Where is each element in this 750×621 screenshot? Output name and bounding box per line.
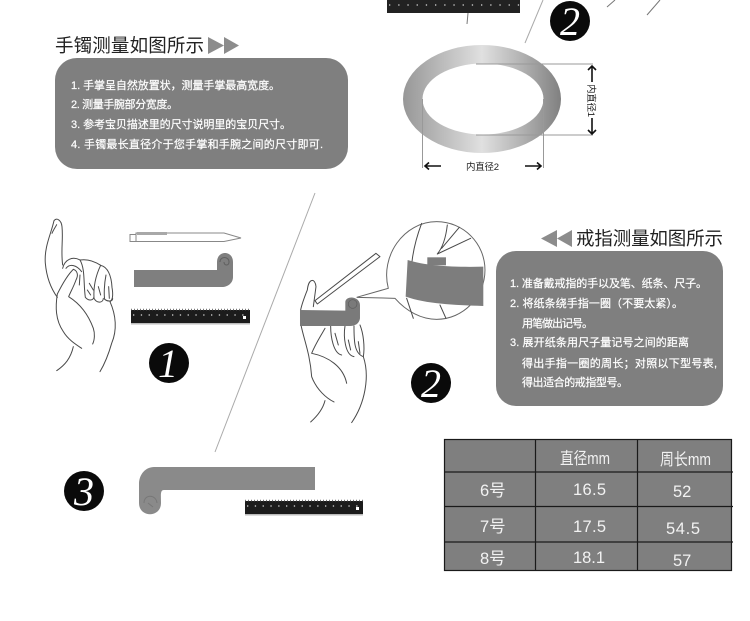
- row: size 8: 57: [673, 552, 691, 570]
- step 2 illustration: [300, 222, 485, 423]
- panel: ring instructions: 2. 将纸条绕手指一圈（不要太紧）。: [510, 296, 683, 310]
- vertical dimension arrow: [588, 66, 596, 134]
- badge: number 3: [64, 469, 104, 514]
- badge: number 3: 3: [73, 469, 94, 514]
- panel: ring instructions: 用笔做出记号。: [522, 316, 593, 330]
- panel: ring instructions: [496, 251, 723, 406]
- panel: ring instructions: 得出手指一圈的周长；对照以下型号表,: [522, 356, 717, 370]
- panel: bracelet instructions: [55, 58, 348, 169]
- row: size 7: 7号: [480, 518, 506, 536]
- panel: bracelet instructions: 3. 参考宝贝描述里的尺寸说明里的宝贝尺寸。: [71, 117, 291, 131]
- label: inner diameter 1: 内直径1: [585, 84, 597, 117]
- table header: 直径mm: [560, 449, 610, 468]
- row: size 7: 54.5: [666, 520, 700, 538]
- bracelet ring: [403, 45, 561, 153]
- row: size 7: 17.5: [573, 518, 606, 536]
- row: size 7: [480, 518, 700, 538]
- panel: ring instructions: 1. 准备戴戒指的手以及笔、纸条、尺子。: [510, 276, 707, 290]
- row: size 8: [480, 549, 691, 570]
- badge: number 1: 1: [158, 341, 178, 386]
- row: size 8: 18.1: [573, 549, 605, 567]
- row: size 6: [480, 481, 691, 501]
- panel: bracelet instructions: 4. 手镯最长直径介于您手掌和手腕之间的尺寸即可.: [71, 137, 323, 151]
- heading: ring measurement: 戒指测量如图所示: [576, 228, 723, 249]
- paper strip: [134, 253, 233, 287]
- panel: bracelet instructions: 2. 测量手腕部分宽度。: [71, 97, 178, 111]
- badge: number 2: 2: [421, 361, 441, 406]
- hand drawing: [45, 219, 115, 372]
- top ruler fragment: [387, 0, 520, 24]
- unrolled paper strip: [139, 467, 315, 514]
- step 1 illustration: [45, 219, 250, 372]
- panel: ring instructions: 得出适合的戒指型号。: [522, 375, 628, 389]
- badge: number 2: [411, 361, 451, 406]
- ruler: [131, 310, 250, 324]
- step 3 illustration: [139, 467, 363, 516]
- badge: number 1: [149, 341, 189, 386]
- pen: [130, 232, 241, 242]
- row: size 8: 8号: [480, 550, 506, 568]
- table: ring sizes: [444, 439, 733, 571]
- badge: top number 2: [550, 0, 590, 44]
- heading: bracelet measurement: 手镯测量如图所示: [55, 35, 204, 56]
- top diagonal divider strokes: [525, 0, 660, 43]
- table header: [560, 449, 711, 469]
- magnifier callout: [357, 222, 485, 319]
- bracelet diagram: [403, 45, 597, 173]
- long diagonal divider: [215, 193, 315, 452]
- badge: top number 2: 2: [560, 0, 580, 44]
- table header: 周长mm: [660, 450, 711, 469]
- row: size 6: 52: [673, 483, 691, 501]
- hand drawing: [301, 280, 366, 423]
- horizontal dimension arrow: [425, 162, 541, 170]
- row: size 6: 16.5: [573, 481, 606, 499]
- paper strip on finger: [300, 298, 360, 326]
- panel: ring instructions: 3. 展开纸条用尺子量记号之间的距离: [510, 335, 689, 349]
- row: size 6: 6号: [480, 482, 506, 500]
- label: inner diameter 2: 内直径2: [466, 161, 499, 173]
- dimension lines: [422, 64, 593, 168]
- ruler: [245, 500, 363, 516]
- panel: bracelet instructions: 1. 手掌呈自然放置状，测量手掌最高宽度。: [71, 78, 280, 92]
- pen in hand: [315, 253, 380, 304]
